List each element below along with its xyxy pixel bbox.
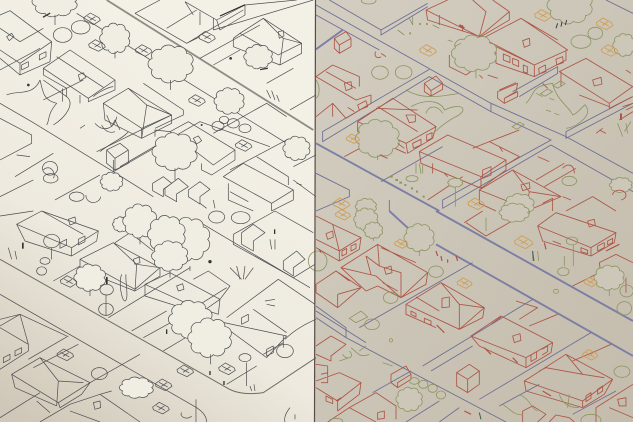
house: top gable	[185, 0, 297, 30]
house: lower right	[223, 157, 293, 211]
red figures lower right	[319, 243, 619, 414]
main road lower left	[0, 259, 316, 394]
roads lower right	[389, 211, 633, 356]
trees lower right	[308, 203, 633, 422]
cars upper left	[84, 13, 252, 151]
shed in block	[424, 76, 443, 96]
small plants upper right	[398, 18, 631, 137]
house: hipped bottom	[12, 358, 90, 408]
block with sheds	[233, 211, 315, 278]
garden outline	[7, 80, 70, 125]
shed top	[334, 32, 351, 53]
house: lower right	[524, 344, 613, 408]
bare shrubs and figures lower left	[8, 239, 295, 422]
house: top right	[233, 18, 302, 65]
house: top left	[0, 11, 52, 75]
cars upper right	[333, 10, 618, 210]
garage centre	[498, 83, 518, 103]
garden lines	[406, 83, 588, 133]
house: long with windows	[449, 18, 568, 77]
driveways and lot lines lower left	[0, 211, 257, 418]
block outlines upper left	[0, 0, 316, 200]
roads upper right	[316, 0, 633, 208]
house: road side lower	[0, 314, 28, 369]
page fold	[314, 0, 316, 422]
house: far right	[599, 254, 633, 293]
panel: left page background	[0, 0, 315, 422]
trees upper right	[316, 0, 633, 216]
house: bottom	[40, 391, 140, 422]
panel: right page coloured map, upper half	[316, 0, 633, 216]
figures and small plants upper left	[27, 12, 268, 126]
house: bottom middle	[479, 170, 561, 211]
house: hipped	[80, 233, 160, 291]
house: long right	[471, 301, 558, 368]
panel: left page monochrome map, lower half	[0, 204, 316, 422]
green dot path and lawn tiles	[390, 24, 565, 197]
red figures and benches upper right	[375, 25, 631, 200]
house: corner lot	[217, 279, 316, 358]
house: right side	[559, 58, 633, 120]
garage and sheds	[316, 336, 546, 422]
panel: right page coloured map, lower half	[308, 203, 633, 422]
garage	[107, 143, 128, 170]
house: bottom right	[536, 163, 616, 211]
house: upper left lower half	[17, 211, 98, 256]
panel: left page monochrome map, upper half	[0, 0, 316, 211]
house: top right	[464, 211, 616, 286]
driveway and path	[95, 117, 128, 152]
tiles and lawn shapes	[339, 251, 579, 415]
cars lower right	[335, 210, 598, 360]
house: long roof	[43, 50, 115, 103]
house: lower middle	[419, 130, 519, 188]
house: lower left	[316, 364, 361, 411]
trees lower left	[44, 204, 293, 398]
house: top hipped	[426, 0, 509, 37]
house: centre cross	[341, 244, 428, 298]
roads upper left	[77, 0, 313, 143]
house: middle block	[344, 98, 436, 157]
house: centre gable	[103, 83, 183, 138]
house: lower middle	[155, 122, 235, 175]
panel: right page background	[315, 0, 633, 422]
house: centre hipped	[406, 283, 484, 329]
sheds row	[153, 177, 210, 204]
house: left gable	[316, 271, 361, 308]
plant clusters upper left	[17, 90, 302, 208]
house: bottom left	[328, 384, 633, 422]
house: long middle	[145, 271, 230, 314]
cars lower left	[57, 276, 235, 414]
house: upper left	[316, 216, 361, 261]
trees upper left	[32, 0, 310, 201]
house: left	[316, 65, 371, 118]
